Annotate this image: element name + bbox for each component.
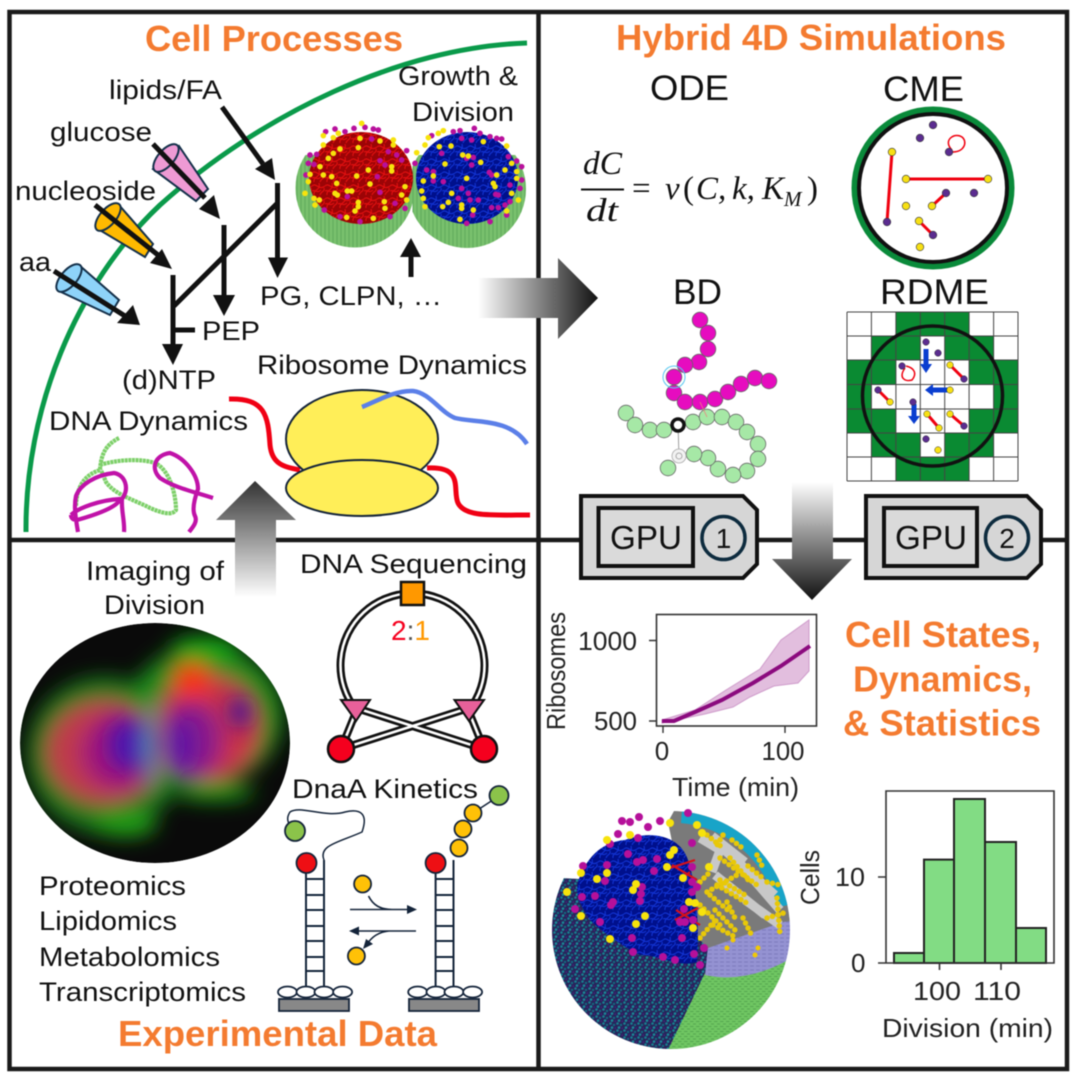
label: omics list: Metabolomics [39,942,220,972]
label: PG, CLPN: PG, CLPN, … [260,281,442,311]
GPU 1 card: 1 [716,523,731,554]
CME diagram [855,110,1011,266]
ODE equation: ( [683,171,694,207]
label: Imaging of Division: Imaging of [86,556,225,586]
histogram: division times: 100 [913,976,961,1006]
label: BD: BD [673,272,722,312]
dividing cell model [296,123,526,248]
DnaA hairpin diagram [278,786,508,1011]
ODE equation: = [632,171,651,207]
ODE equation: dC [583,146,623,182]
label: PEP: PEP [202,316,260,346]
label: Imaging of Division: Division [104,590,205,620]
label: CME: CME [883,69,964,109]
panel: cell states, dynamics and statistics [540,612,1054,1052]
ODE equation: K [761,171,786,207]
label: 2:1 ratio: 2:1 [391,615,430,646]
GPU 1 card [581,496,757,578]
label: omics list [39,871,246,1007]
DNA strands [71,438,213,532]
histogram: division times: 110 [973,976,1021,1006]
ODE equation: ) [807,171,818,207]
label: aa: aa [19,247,52,277]
histogram: division times: 0 [851,948,865,978]
ODE equation: k, [732,171,755,207]
label: glucose: glucose [50,117,152,147]
GPU 1 card: GPU [610,519,682,556]
line chart: ribosomes over time: 100 [762,736,804,766]
line chart: ribosomes over time: 1000 [578,626,637,656]
label: ODE: ODE [650,68,729,108]
label: Growth and Division: Growth & [398,61,518,91]
line chart: ribosomes over time: 500 [594,706,637,736]
ODE equation: C, [696,171,726,207]
ODE equation [581,146,818,229]
label: nucleoside: nucleoside [15,176,156,206]
heading: Cell States, Dynamics, and Statistics: Cell States, [845,614,1041,655]
heading: Cell States, Dynamics, and Statistics [843,614,1041,744]
transporter: glucose [149,140,208,201]
label: DNA Sequencing: DNA Sequencing [300,549,527,579]
label: omics list: Proteomics [39,871,186,901]
panel: hybrid 4D simulations [581,17,1018,483]
line chart: ribosomes over time: 0 [655,736,669,766]
line chart: ribosomes over time [541,612,816,802]
histogram: division times: 10 [835,862,865,892]
transporter: nucleoside [91,199,153,257]
label: (d)NTP: (d)NTP [122,365,216,395]
GPU 2 card [866,496,1041,578]
ODE equation: ν [665,171,680,207]
label: DNA Dynamics: DNA Dynamics [49,406,248,436]
label: Imaging of Division [86,556,225,620]
GPU 2 card: GPU [895,519,967,556]
ODE equation: dt [586,193,619,229]
label: Ribosome Dynamics: Ribosome Dynamics [257,350,527,380]
label: Growth and Division [398,61,518,127]
panel: experimental data [20,549,527,1054]
whole-cell model [551,808,791,1050]
cell membrane curve [26,43,527,532]
ODE equation: M [783,187,803,211]
arrow: cell processes to simulations [478,258,598,339]
RDME lattice [847,312,1018,481]
label: lipids/FA: lipids/FA [109,75,222,105]
line chart: ribosomes over time: Time (min) [672,772,799,802]
pathway arrows [54,107,421,365]
label: RDME: RDME [880,272,989,312]
arrow: simulations to cell states [772,482,852,600]
ribosome with mRNA [229,390,530,516]
arrow: experimental data to cell processes [216,481,296,597]
histogram: division times [795,791,1054,1043]
BD polymer beads [618,312,777,483]
heading: Experimental Data: Experimental Data [118,1013,438,1054]
heading: Hybrid 4D Simulations: Hybrid 4D Simulations [616,17,1006,58]
label: Growth and Division: Division [412,97,514,127]
line chart: ribosomes over time: Ribosomes [541,612,571,730]
panel: cell processes [15,18,530,532]
transporter: amino acid [52,260,119,315]
heading: Cell States, Dynamics, and Statistics: & Statistics [843,702,1041,744]
label: omics list: Lipidomics [39,906,177,936]
histogram: division times: Cells [795,850,825,905]
GPU 2 card: 2 [999,523,1015,554]
heading: Cell States, Dynamics, and Statistics: Dynamics, [853,658,1032,700]
fluorescence microscopy image [20,623,290,863]
label: omics list: Transcriptomics [39,977,246,1007]
label: DnaA Kinetics: DnaA Kinetics [292,774,478,804]
histogram: division times: Division (min) [882,1013,1053,1043]
heading: Cell Processes: Cell Processes [145,18,403,59]
DNA replication diagram [328,582,497,762]
